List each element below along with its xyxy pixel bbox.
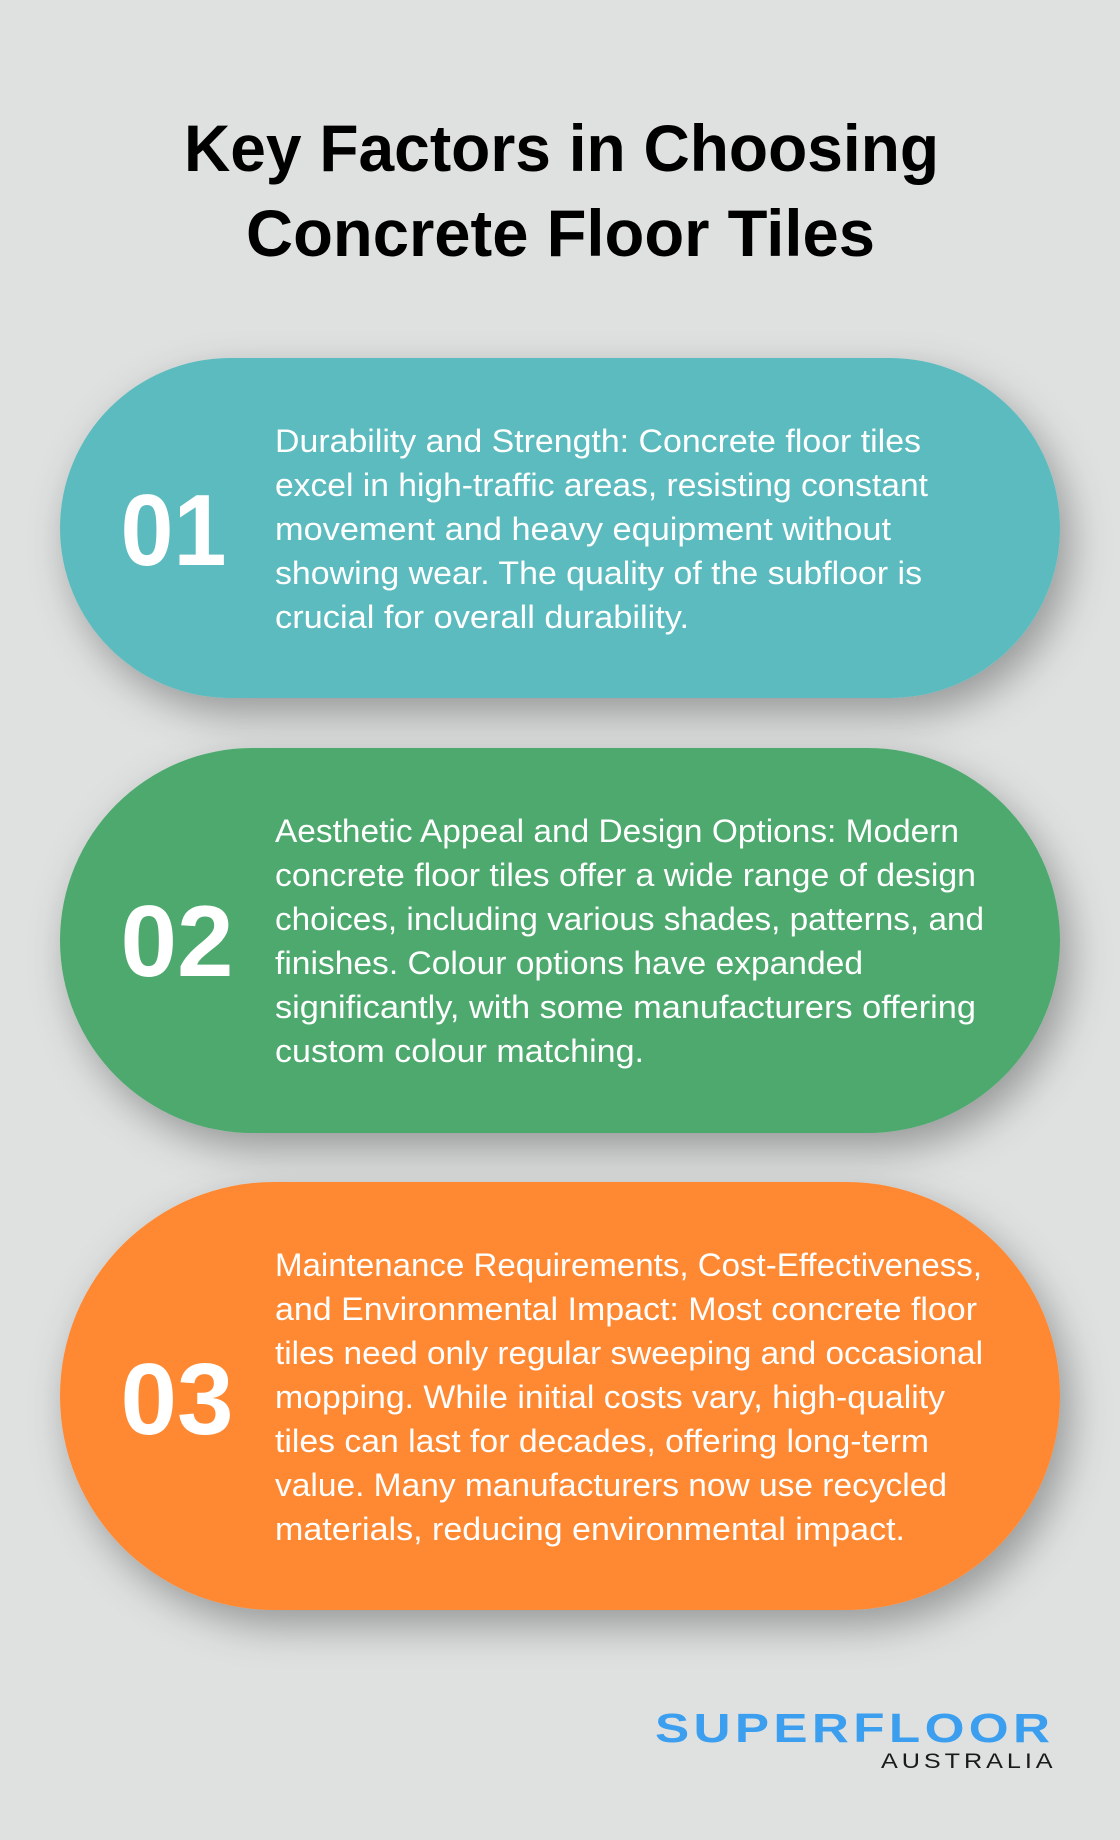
text block: aesthetic: significantly, with some manufacturers offering: [275, 989, 976, 1025]
number 02: 02: [120, 886, 234, 998]
text block: durability: crucial for overall durability.: [275, 599, 689, 635]
text block: aesthetic: Aesthetic Appeal and Design Options: Modern: [275, 813, 959, 849]
text block: maintenance: tiles need only regular sweeping and occasional: [275, 1335, 983, 1371]
text block: maintenance: and Environmental Impact: Most concrete floor: [275, 1291, 977, 1327]
pill background: orange: [60, 1182, 1060, 1610]
number 01: 01: [120, 475, 226, 587]
logo: Superfloor Australia: SUPERFLOOR: [655, 1705, 1050, 1751]
panel: aesthetic appeal: [60, 748, 1060, 1133]
logo: Superfloor Australia: [655, 1705, 1053, 1773]
text block: durability: [275, 423, 928, 635]
text block: aesthetic: custom colour matching.: [275, 1033, 644, 1069]
pill background: teal: [60, 358, 1060, 698]
text block: aesthetic: finishes. Colour options have expanded: [275, 945, 863, 981]
panel: maintenance and cost: [60, 1182, 1060, 1610]
text block: maintenance: mopping. While initial costs vary, high-quality: [275, 1379, 945, 1415]
text block: maintenance: Maintenance Requirements, Cost-Effectiveness,: [275, 1247, 982, 1283]
text block: maintenance: materials, reducing environmental impact.: [275, 1511, 905, 1547]
text block: aesthetic: [275, 813, 984, 1069]
title: Key Factors in Choosing: [184, 111, 939, 185]
logo: Superfloor Australia: AUSTRALIA: [881, 1749, 1053, 1773]
text block: durability: showing wear. The quality of the subfloor is: [275, 555, 922, 591]
text block: aesthetic: choices, including various shades, patterns, and: [275, 901, 984, 937]
text block: durability: excel in high-traffic areas, resisting constant: [275, 467, 928, 503]
pill background: green: [60, 748, 1060, 1133]
panel: durability and strength: [60, 358, 1060, 698]
number 03: 03: [120, 1344, 234, 1456]
text block: maintenance: tiles can last for decades, offering long-term: [275, 1423, 929, 1459]
text block: durability: Durability and Strength: Concrete floor tiles: [275, 423, 921, 459]
text block: durability: movement and heavy equipment without: [275, 511, 891, 547]
title: Concrete Floor Tiles: [246, 196, 875, 270]
text block: aesthetic: concrete floor tiles offer a wide range of design: [275, 857, 976, 893]
text block: maintenance: [275, 1247, 983, 1547]
text block: maintenance: value. Many manufacturers now use recycled: [275, 1467, 947, 1503]
title: [184, 111, 939, 270]
